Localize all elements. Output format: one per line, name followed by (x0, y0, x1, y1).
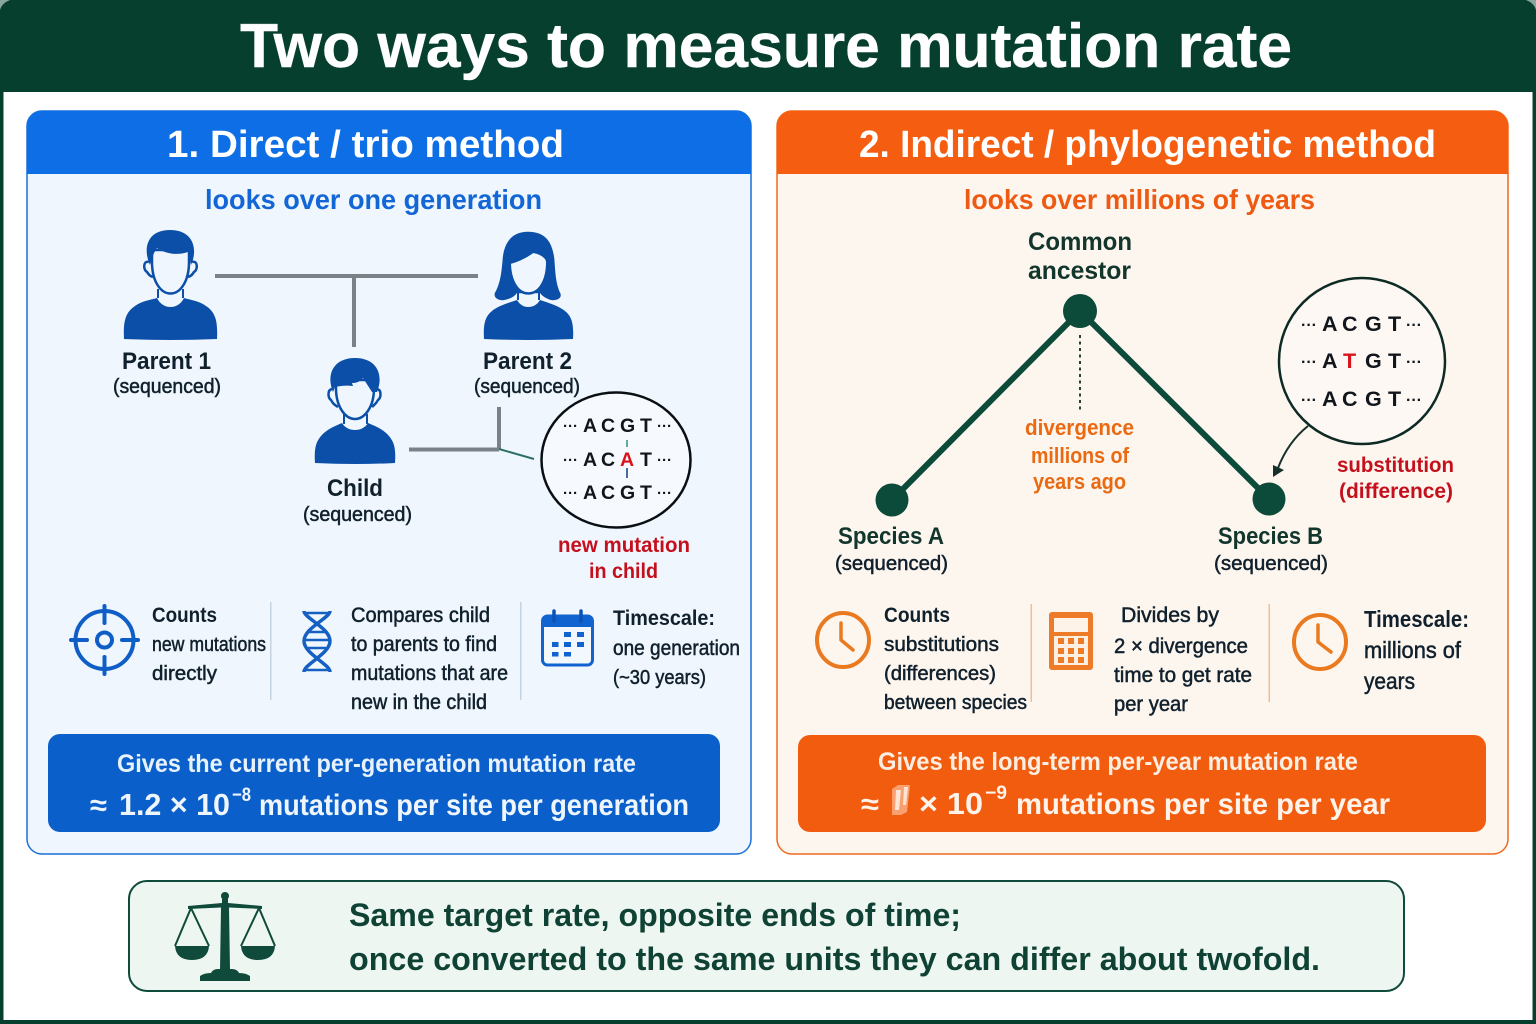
result box: per-year rate: Gives the long-term per-year mutation rate (878, 748, 1358, 776)
label: parent 2: (sequenced) (474, 376, 580, 398)
icon: calculator (1049, 612, 1093, 670)
result box: per-generation rate: −8 (232, 785, 251, 806)
label: parent 1 (113, 348, 221, 398)
callout: sequence circle with substitution: ··· (1406, 392, 1422, 409)
subheading: millions of years: looks over millions of years (964, 184, 1315, 215)
label: new mutation in child (558, 534, 690, 583)
text: counts substitutions: (differences) (884, 663, 996, 685)
text: divides by divergence time (1114, 604, 1252, 716)
text: counts substitutions: between species (884, 692, 1027, 714)
text: timescale millions of years: millions of (1364, 637, 1462, 663)
pedigree connector lines (215, 276, 534, 459)
label: child: Child (327, 475, 383, 502)
phylogenetic tree (876, 294, 1286, 516)
result box: per-year rate: −9 (985, 783, 1007, 804)
icon: DNA helix (304, 611, 330, 672)
label: divergence: years ago (1033, 469, 1126, 494)
panel: indirect phylogenetic method (777, 111, 1508, 854)
callout: sequence magnifier with new mutation: A (620, 449, 634, 471)
callout: sequence magnifier with new mutation: C (601, 482, 615, 504)
label: common ancestor (1028, 228, 1132, 285)
label: divergence (1025, 415, 1134, 494)
label: child: (sequenced) (303, 504, 412, 526)
label: common ancestor: Common (1028, 228, 1132, 256)
text: timescale millions of years: Timescale: (1364, 606, 1469, 632)
takeaway text: Same target rate, opposite ends of time; (349, 897, 961, 933)
text: timescale one generation: (~30 years) (613, 667, 706, 689)
label: species B: (sequenced) (1214, 553, 1328, 575)
title banner (0, 0, 1536, 92)
callout: sequence circle with substitution: T (1388, 349, 1401, 373)
callout: sequence circle with substitution: ··· (1301, 317, 1317, 334)
result box: per-generation rate: 1.2 × 10 (119, 787, 230, 822)
label: divergence: millions of (1031, 443, 1130, 468)
callout: sequence circle with substitution: ··· (1406, 354, 1422, 371)
callout: sequence magnifier with new mutation: T (640, 449, 652, 471)
icon: balance scales (175, 892, 275, 981)
callout: sequence magnifier with new mutation: ··· (657, 452, 672, 469)
panel: direct trio method (27, 111, 751, 854)
text: compares child to parents: mutations that are (351, 662, 508, 685)
takeaway panel (129, 881, 1404, 991)
subheading: one generation: looks over one generation (205, 184, 542, 215)
text: divides by divergence time: 2 × divergence (1114, 635, 1248, 658)
label: parent 1: (sequenced) (113, 376, 221, 398)
text: divides by divergence time: Divides by (1121, 604, 1219, 627)
callout: sequence magnifier with new mutation: G (620, 415, 635, 437)
callout: sequence circle with substitution: G (1365, 349, 1382, 373)
callout: sequence circle with substitution (1279, 278, 1445, 444)
result box: per-generation rate: ≈ (90, 790, 107, 822)
label: child (303, 475, 412, 526)
callout: sequence circle with substitution: ··· (1301, 392, 1317, 409)
label: parent 2 (474, 348, 580, 398)
callout: sequence magnifier with new mutation: G (620, 482, 635, 504)
label: new mutation in child: in child (589, 560, 658, 583)
callout: sequence circle with substitution: ··· (1301, 354, 1317, 371)
label: substitution difference: substitution (1337, 454, 1454, 477)
text: counts new mutations (152, 604, 266, 685)
icon: calendar (542, 611, 593, 665)
label: species A: (sequenced) (835, 553, 948, 575)
icon: parent 1 (124, 230, 217, 340)
result box: per-year rate: mutations per site per year (1016, 788, 1390, 821)
result box: per-year rate: ≈ (861, 789, 879, 821)
label: substitution difference (1337, 454, 1454, 503)
text: timescale one generation: one generation (613, 637, 740, 660)
text: timescale one generation: Timescale: (613, 607, 715, 630)
callout: sequence circle with substitution: T (1388, 387, 1401, 411)
label: parent 1: Parent 1 (122, 348, 211, 375)
label: parent 2: Parent 2 (483, 348, 572, 375)
callout: sequence magnifier with new mutation: A (583, 449, 597, 471)
title: Two ways to measure mutation rate (240, 12, 1292, 81)
label: substitution difference: (difference) (1339, 480, 1453, 503)
result box: per-generation rate (48, 734, 720, 832)
icon: clock (817, 613, 869, 667)
text: timescale millions of years (1364, 606, 1469, 694)
callout: sequence circle with substitution: C (1342, 387, 1358, 411)
label: species B: Species B (1218, 523, 1323, 550)
callout: sequence circle with substitution: G (1365, 387, 1382, 411)
text: counts new mutations: Counts (152, 604, 217, 627)
text: counts substitutions: substitutions (884, 634, 999, 656)
icon: parent 2 (484, 231, 573, 340)
callout: sequence magnifier with new mutation (542, 392, 690, 528)
callout: sequence circle with substitution: G (1365, 312, 1382, 336)
label: species A (835, 523, 948, 575)
callout: sequence circle with substitution: A (1322, 387, 1338, 411)
icon: child (315, 358, 395, 464)
result box: per-year rate (798, 735, 1486, 832)
label: species B (1214, 523, 1328, 575)
takeaway text: once converted to the same units they can differ about twofold. (349, 941, 1320, 977)
text: compares child to parents (351, 604, 508, 714)
callout: sequence magnifier with new mutation: ··· (563, 485, 578, 502)
text: counts substitutions: Counts (884, 604, 950, 627)
result box: per-generation rate: Gives the current per-generation mutation rate (117, 750, 636, 778)
callout: sequence magnifier with new mutation: ··· (657, 418, 672, 435)
callout: sequence circle with substitution: T (1343, 349, 1356, 373)
callout: sequence circle with substitution: T (1388, 312, 1401, 336)
callout: sequence magnifier with new mutation: A (583, 415, 597, 437)
callout: sequence circle with substitution: A (1322, 349, 1338, 373)
heading: indirect method: 2. Indirect / phylogenetic method (859, 124, 1436, 166)
callout: sequence magnifier with new mutation: ··· (563, 452, 578, 469)
text: compares child to parents: to parents to find (351, 633, 497, 656)
icon: clock timescale (1294, 615, 1346, 669)
result box: per-generation rate: mutations per site per generation (259, 789, 689, 822)
callout: sequence circle with substitution: A (1322, 312, 1338, 336)
callout: sequence circle with substitution: ··· (1406, 317, 1422, 334)
text: compares child to parents: Compares child (351, 604, 490, 627)
icon: target (71, 606, 138, 674)
label: common ancestor: ancestor (1028, 257, 1131, 285)
text: divides by divergence time: time to get rate (1114, 664, 1252, 687)
callout: sequence magnifier with new mutation: T (640, 415, 652, 437)
callout: sequence magnifier with new mutation: ··· (657, 485, 672, 502)
text: counts substitutions (884, 604, 1027, 714)
takeaway text (349, 897, 1320, 977)
callout: sequence circle with substitution: C (1342, 312, 1358, 336)
result box: per-year rate: × 10 (919, 786, 983, 821)
text: timescale one generation (613, 607, 740, 689)
callout: sequence magnifier with new mutation: ··· (563, 418, 578, 435)
text: timescale millions of years: years (1364, 668, 1415, 694)
callout: sequence magnifier with new mutation: C (601, 415, 615, 437)
label: new mutation in child: new mutation (558, 534, 690, 557)
callout: sequence magnifier with new mutation: A (583, 482, 597, 504)
callout: sequence magnifier with new mutation: T (640, 482, 652, 504)
text: counts new mutations: new mutations (152, 634, 266, 656)
text: counts new mutations: directly (152, 663, 217, 685)
text: divides by divergence time: per year (1114, 693, 1188, 716)
arrow: circle to species B (1273, 426, 1308, 477)
callout: sequence magnifier with new mutation: C (601, 449, 615, 471)
heading: direct method: 1. Direct / trio method (167, 124, 564, 166)
text: compares child to parents: new in the child (351, 691, 487, 714)
label: species A: Species A (838, 523, 944, 550)
label: divergence: divergence (1025, 415, 1134, 440)
